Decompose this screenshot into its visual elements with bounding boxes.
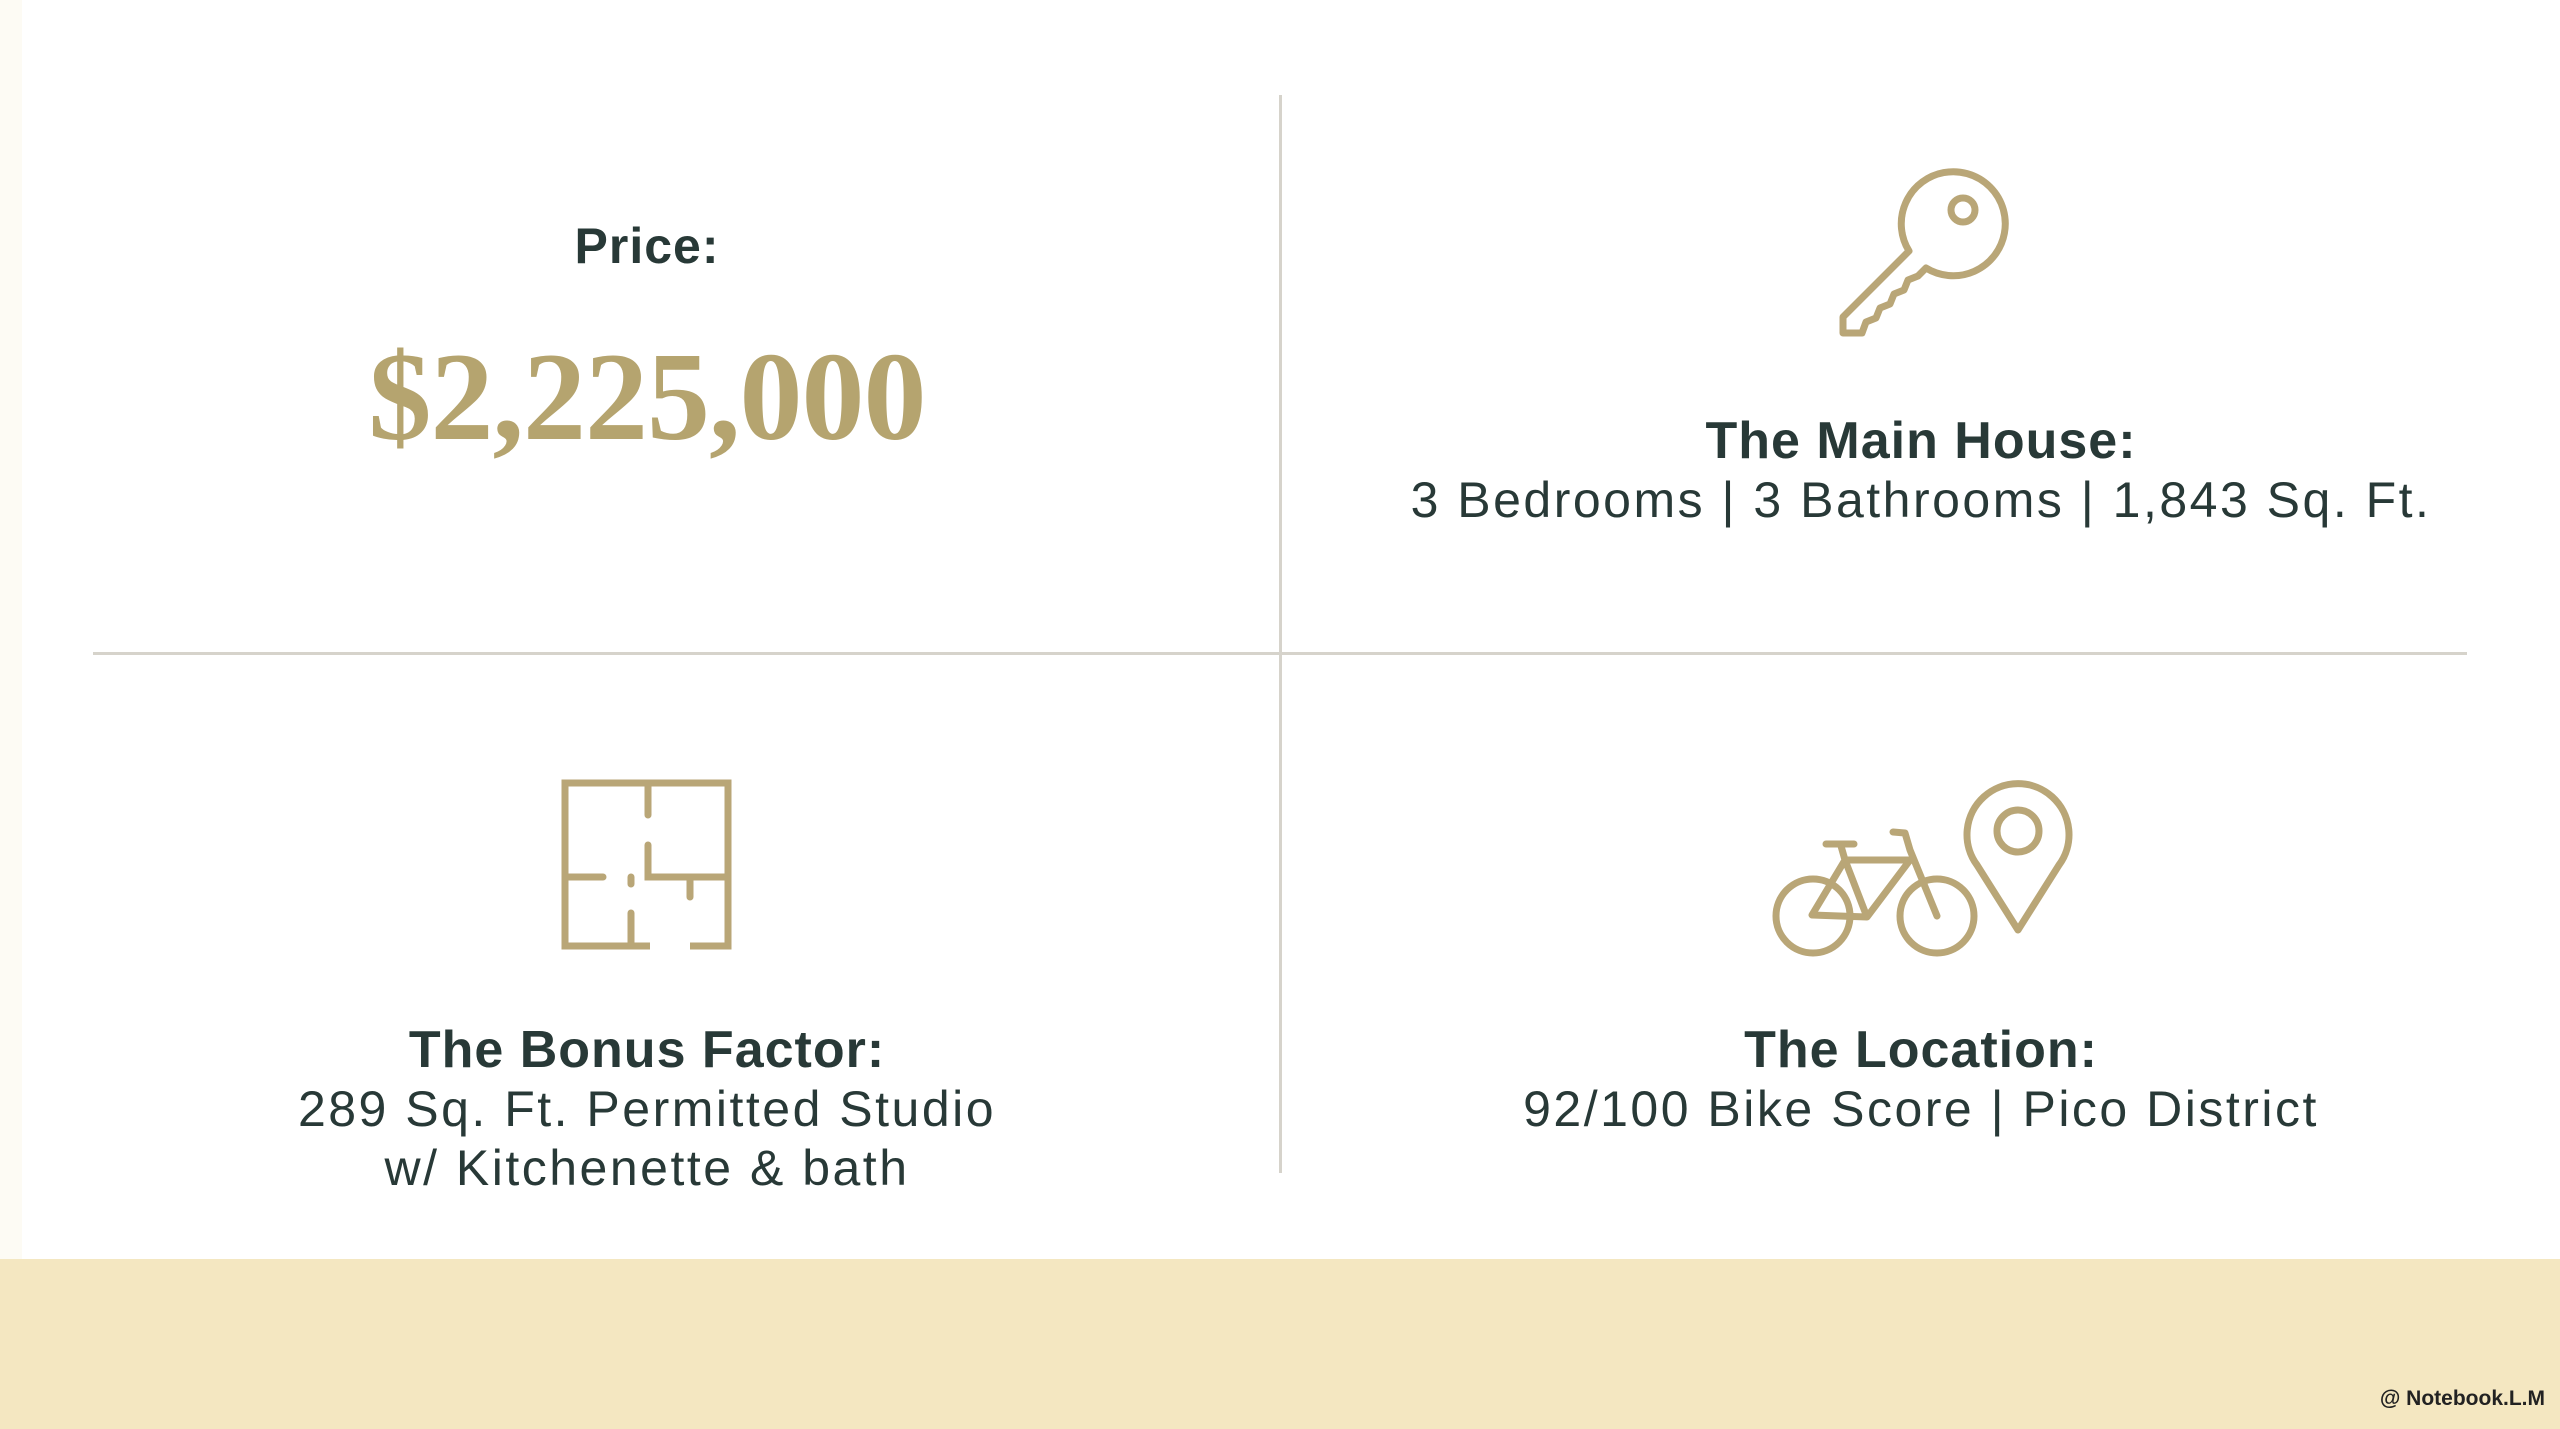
panel: main house (1411, 168, 2431, 528)
text: bonus details (298, 1081, 996, 1196)
icon: bike and pin (1772, 780, 2072, 956)
text: bonus details: w/ Kitchenette & bath (384, 1140, 910, 1196)
panel: price (368, 218, 926, 467)
panel: bonus factor (298, 780, 996, 1196)
watermark: @ Notebook.L.M (2380, 1387, 2545, 1410)
icon: key (1840, 168, 2009, 336)
text: bonus details: 289 Sq. Ft. Permitted Studio (298, 1081, 996, 1137)
heading: price: Price: (575, 218, 719, 274)
text: main house details: 3 Bedrooms | 3 Bathrooms | 1,843 Sq. Ft. (1411, 472, 2431, 528)
heading: bonus factor: The Bonus Factor: (409, 1021, 885, 1079)
price value: $2,225,000 (368, 328, 926, 467)
heading: main house: The Main House: (1705, 412, 2137, 470)
icon: floor plan (562, 780, 732, 950)
footer band (0, 1259, 2560, 1429)
text: location details: 92/100 Bike Score | Pico District (1523, 1081, 2319, 1137)
heading: location: The Location: (1744, 1021, 2098, 1079)
panel: location (1523, 780, 2319, 1137)
